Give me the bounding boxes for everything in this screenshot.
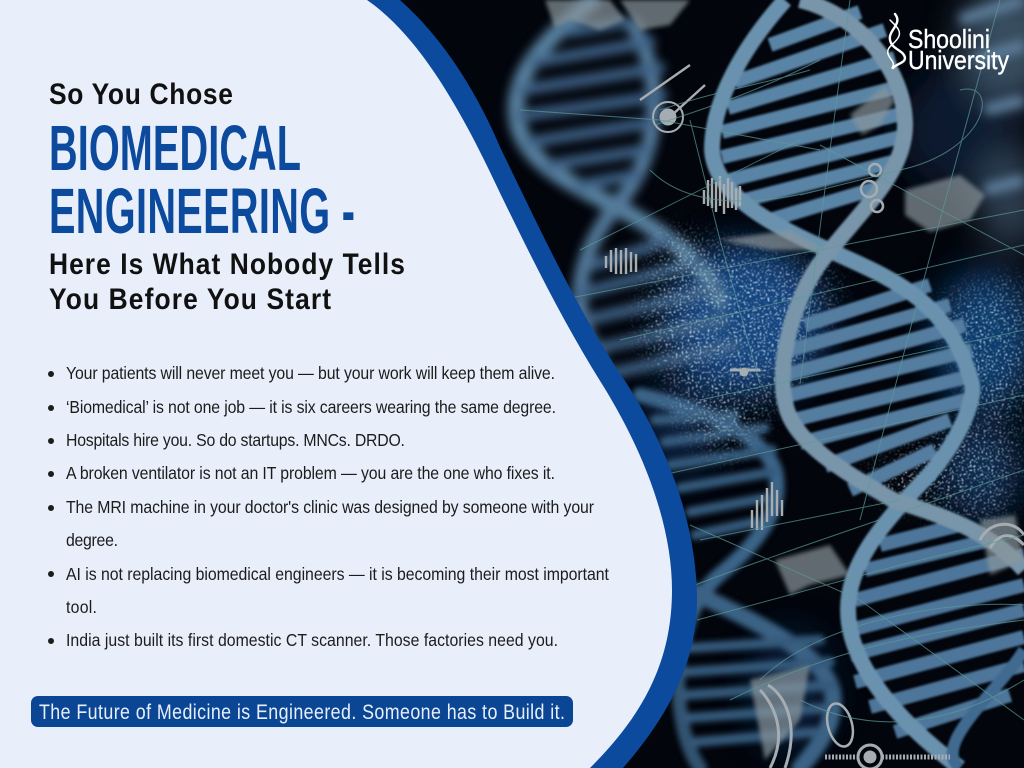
bullet text: The MRI machine in your doctor's clinic was designed by someone with your <box>66 497 594 517</box>
data wave glyphs <box>606 65 782 530</box>
deep blue haze areas <box>640 0 1024 750</box>
main DNA helix <box>712 0 1024 768</box>
rungs: upper helix <box>722 12 905 220</box>
rungs: lower helix <box>850 525 1024 732</box>
logo: Shoolini University: University <box>908 45 1009 75</box>
right edge helix fragment <box>960 0 1024 190</box>
bullet text: degree. <box>66 530 118 550</box>
dark DNA background image <box>380 0 1024 768</box>
strands <box>712 0 972 768</box>
title: Biomedical Engineering: BIOMEDICAL <box>49 114 301 184</box>
icon: DNA strand <box>888 14 905 68</box>
blue wavy border band <box>0 0 697 768</box>
subtitle <box>49 246 405 315</box>
bullet text: ‘Biomedical’ is not one job — it is six careers wearing the same degree. <box>66 397 556 417</box>
title: Biomedical Engineering: ENGINEERING - <box>49 177 355 247</box>
blurred left helix, lower <box>640 395 833 768</box>
bullet markers <box>48 371 54 644</box>
subtitle: You Before You Start <box>49 281 332 315</box>
logo: Shoolini University <box>888 14 1009 75</box>
subtitle: Here Is What Nobody Tells <box>49 246 405 280</box>
title intro line: So You Chose <box>49 76 233 110</box>
thin teal network lines <box>520 0 1024 722</box>
speckle texture <box>640 230 1024 520</box>
light content panel <box>0 0 672 768</box>
bullet list <box>48 363 609 650</box>
rungs: centre helix <box>782 285 975 490</box>
bullet text: Hospitals hire you. So do startups. MNCs. DRDO. <box>66 430 405 450</box>
bullet text <box>66 363 609 650</box>
bullet text: Your patients will never meet you — but your work will keep them alive. <box>66 363 555 383</box>
blurred left helix, top <box>516 0 735 390</box>
wordmark: Shoolini <box>908 24 990 54</box>
title block <box>49 76 405 315</box>
bullet text: AI is not replacing biomedical engineers — it is becoming their most important <box>66 564 609 584</box>
grey world map fragments <box>545 0 1024 760</box>
title: Biomedical Engineering <box>49 114 355 247</box>
bullet text: India just built its first domestic CT scanner. Those factories need you. <box>66 630 558 650</box>
bullet text: tool. <box>66 597 97 617</box>
circular HUD targets <box>653 102 1024 768</box>
bullet text: A broken ventilator is not an IT problem — you are the one who fixes it. <box>66 463 555 483</box>
tagline pill: The Future of Medicine is Engineered. Someone has to Build it. <box>39 701 565 724</box>
